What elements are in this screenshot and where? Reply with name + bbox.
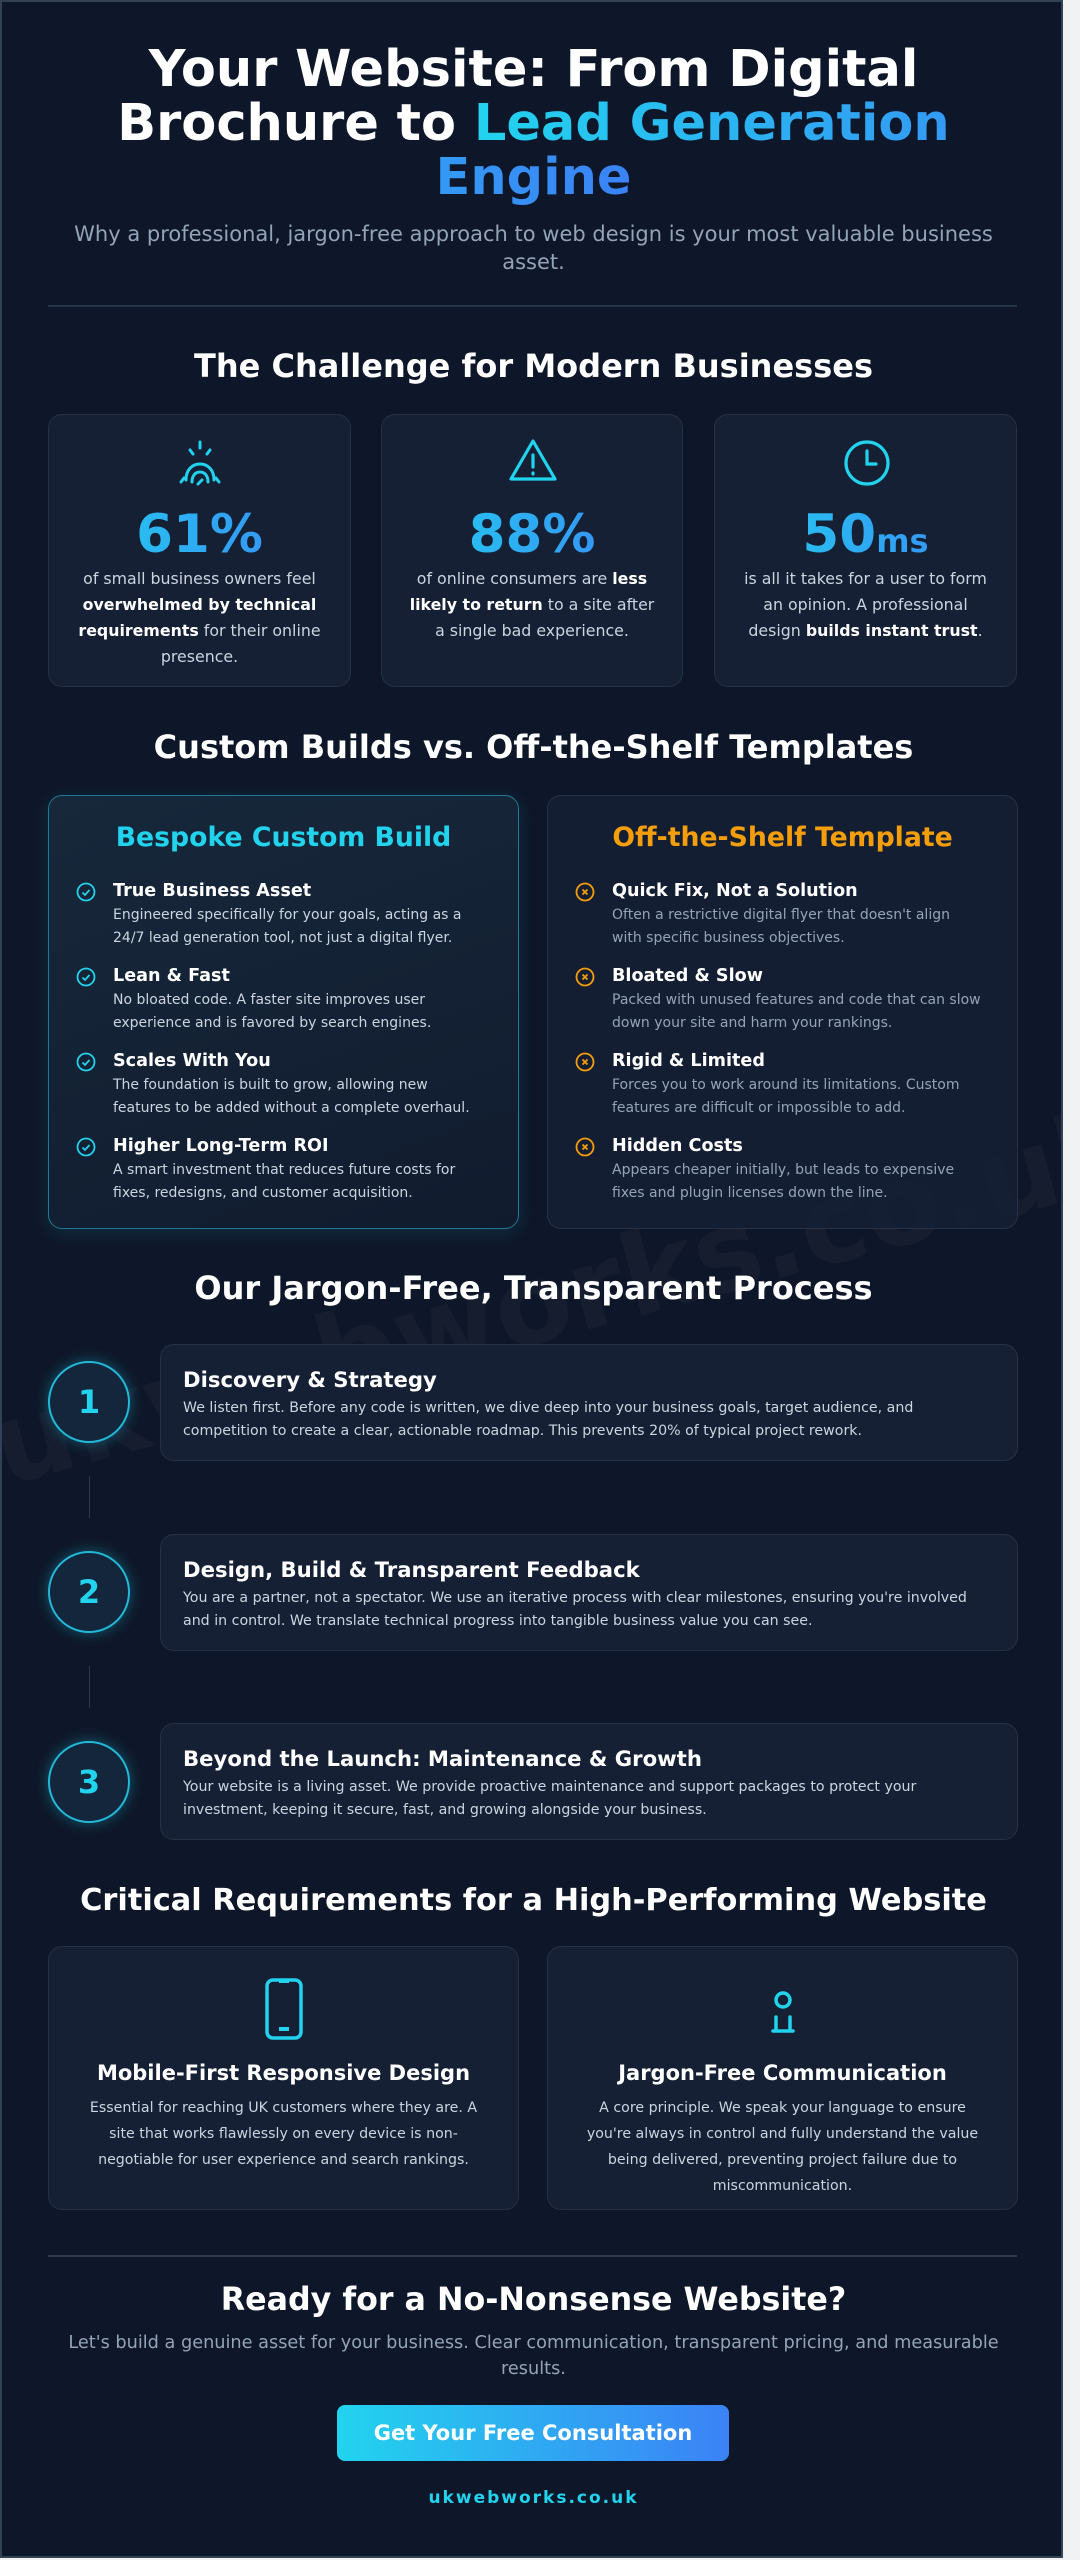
- panel title: Bespoke Custom Build: [116, 822, 451, 853]
- CTA heading: Ready for a No-Nonsense Website?: [221, 2282, 846, 2318]
- step 2 circle: 2: [78, 1573, 100, 1611]
- step 2 card: [160, 1534, 1018, 1651]
- step 3 card: [160, 1723, 1018, 1840]
- item: lean & fast: [76, 966, 431, 1031]
- CTA text: [68, 2333, 999, 2379]
- requirement text: you're always in control and fully understand the value: [587, 2126, 978, 2142]
- icon: warning: [509, 439, 557, 481]
- requirement text: A core principle. We speak your language to ensure: [599, 2100, 966, 2116]
- panel: off-the-shelf template: Appears cheaper initially, but leads to expensive: [612, 1162, 954, 1178]
- item: hidden costs: [576, 1136, 954, 1201]
- panel: bespoke custom build: The foundation is built to grow, allowing new: [113, 1077, 428, 1093]
- stat 50ms: 50ms: [802, 504, 929, 565]
- step 1 card: competition to create a clear, actionable roadmap. This prevents 20% of typical project rework.: [183, 1423, 862, 1439]
- icon: phone: [265, 1978, 303, 2040]
- requirement card: communication: [547, 1946, 1018, 2210]
- panel: bespoke custom build: True Business Asset: [113, 881, 311, 901]
- step 1 card: [160, 1344, 1018, 1461]
- panel: off-the-shelf template: Rigid & Limited: [612, 1051, 765, 1071]
- panel: bespoke custom build: 24/7 lead generation tool, not just a digital flyer.: [113, 930, 452, 946]
- requirement title: Jargon-Free Communication: [618, 2061, 947, 2085]
- CTA button: Get Your Free Consultation: [374, 2421, 692, 2445]
- stat card 2: [381, 414, 683, 687]
- subtitle: Why a professional, jargon-free approach to web design is your most valuable business: [74, 222, 993, 246]
- panel: bespoke custom build: No bloated code. A faster site improves user: [113, 992, 425, 1008]
- stat text: is all it takes for a user to form: [744, 569, 987, 588]
- panel: off-the-shelf template: with specific business objectives.: [612, 930, 845, 946]
- panel: off-the-shelf template: down your site and harm your rankings.: [612, 1015, 892, 1031]
- heading: custom vs template: Custom Builds vs. Off-the-Shelf Templates: [154, 728, 913, 766]
- step 3 circle: [48, 1741, 130, 1823]
- stat 61%: 61%: [136, 504, 263, 565]
- step 3 card: investment, keeping it secure, fast, and growing alongside your business.: [183, 1802, 707, 1818]
- stat text: requirements for their online: [78, 621, 321, 640]
- panel: bespoke custom build: experience and is favored by search engines.: [113, 1015, 431, 1031]
- item: scales with you: [76, 1051, 470, 1116]
- requirement text: [587, 2100, 978, 2194]
- item: higher ROI: [76, 1136, 456, 1201]
- panel: off-the-shelf template: Bloated & Slow: [612, 966, 763, 986]
- item: quick fix: [576, 881, 950, 946]
- stat 50ms: [715, 505, 1016, 571]
- requirement text: [90, 2100, 477, 2168]
- CTA button: [337, 2405, 729, 2461]
- requirement text: site that works flawlessly on every device is non-: [109, 2126, 458, 2142]
- panel: off-the-shelf template: Packed with unused features and code that can slow: [612, 992, 981, 1008]
- requirement text: negotiable for user experience and search rankings.: [98, 2152, 469, 2168]
- stat 88%: [382, 505, 682, 565]
- stat text: of online consumers are less: [417, 569, 647, 588]
- step 1 circle: [48, 1361, 130, 1443]
- title: Engine: [435, 148, 632, 207]
- step 3 card: Your website is a living asset. We provide proactive maintenance and support packages to protect your: [183, 1779, 916, 1795]
- step 1 card: Discovery & Strategy: [183, 1367, 437, 1392]
- requirement text: being delivered, preventing project failure due to: [608, 2152, 957, 2168]
- item: rigid & limited: [576, 1051, 959, 1116]
- panel: bespoke custom build: Scales With You: [113, 1051, 271, 1071]
- panel: bespoke custom build: fixes, redesigns, and customer acquisition.: [113, 1185, 413, 1201]
- panel: off-the-shelf template: Forces you to work around its limitations. Custom: [612, 1077, 959, 1093]
- step 3 card: Beyond the Launch: Maintenance & Growth: [183, 1746, 702, 1771]
- stat text: [744, 569, 987, 640]
- panel: off-the-shelf template: [547, 795, 1018, 1229]
- subtitle: asset.: [502, 250, 565, 274]
- CTA text: Let's build a genuine asset for your business. Clear communication, transparent pricing, and measurable: [68, 2333, 999, 2353]
- stat text: design builds instant trust.: [748, 621, 983, 640]
- panel: bespoke custom build: A smart investment that reduces future costs for: [113, 1162, 455, 1178]
- stat 88%: 88%: [469, 504, 595, 565]
- footer url: ukwebworks.co.uk: [428, 2488, 639, 2508]
- step 3 circle: 3: [78, 1763, 100, 1801]
- panel title: Off-the-Shelf Template: [612, 822, 953, 853]
- subtitle: [74, 222, 993, 274]
- icon: person: [771, 1991, 795, 2033]
- panel: bespoke custom build: [48, 795, 519, 1229]
- item: bloated & slow: [576, 966, 981, 1031]
- requirement title: Mobile-First Responsive Design: [97, 2061, 470, 2085]
- step 1 circle: 1: [78, 1383, 100, 1421]
- panel: off-the-shelf template: Quick Fix, Not a Solution: [612, 881, 858, 901]
- stat text: [410, 569, 654, 640]
- heading: challenge: The Challenge for Modern Businesses: [194, 347, 873, 385]
- step 2 card: Design, Build & Transparent Feedback: [183, 1557, 640, 1582]
- icon: overwhelmed: [179, 440, 221, 486]
- panel: off-the-shelf template: Hidden Costs: [612, 1136, 743, 1156]
- stat card 1: [48, 414, 351, 687]
- title: Brochure to Lead Generation: [117, 94, 950, 153]
- requirement card: mobile: [48, 1946, 519, 2210]
- step 2 card: You are a partner, not a spectator. We use an iterative process with clear milestones, ensuring you're involved: [183, 1590, 967, 1606]
- CTA text: results.: [501, 2359, 566, 2379]
- stat text: [78, 569, 321, 666]
- step 2 card: and in control. We translate technical progress into tangible business value you can see.: [183, 1613, 813, 1629]
- stat 61%: [49, 505, 350, 565]
- panel: bespoke custom build: features to be added without a complete overhaul.: [113, 1100, 470, 1116]
- stat text: overwhelmed by technical: [83, 595, 316, 614]
- icon: clock: [844, 440, 890, 486]
- panel: off-the-shelf template: fixes and plugin licenses down the line.: [612, 1185, 888, 1201]
- step 2 circle: [48, 1551, 130, 1633]
- panel: bespoke custom build: Higher Long-Term ROI: [113, 1136, 329, 1156]
- requirement text: Essential for reaching UK customers where they are. A: [90, 2100, 477, 2116]
- stat text: a single bad experience.: [435, 621, 629, 640]
- heading: process: Our Jargon-Free, Transparent Process: [194, 1269, 873, 1307]
- panel: bespoke custom build: Lean & Fast: [113, 966, 230, 986]
- item: true business asset: [76, 881, 462, 946]
- title: Your Website: From Digital: [149, 40, 918, 99]
- panel: off-the-shelf template: Often a restrictive digital flyer that doesn't align: [612, 907, 950, 923]
- stat card 3: [714, 414, 1017, 687]
- stat text: likely to return to a site after: [410, 595, 654, 614]
- heading: requirements: Critical Requirements for a High-Performing Website: [80, 1883, 987, 1918]
- step 1 card: We listen first. Before any code is written, we dive deep into your business goals, target audience, and: [183, 1400, 913, 1416]
- title: [117, 40, 950, 207]
- stat text: an opinion. A professional: [763, 595, 968, 614]
- panel: bespoke custom build: Engineered specifically for your goals, acting as a: [113, 907, 462, 923]
- requirement text: miscommunication.: [713, 2178, 852, 2194]
- stat text: presence.: [161, 647, 238, 666]
- stat text: of small business owners feel: [83, 569, 316, 588]
- panel: off-the-shelf template: features are difficult or impossible to add.: [612, 1100, 905, 1116]
